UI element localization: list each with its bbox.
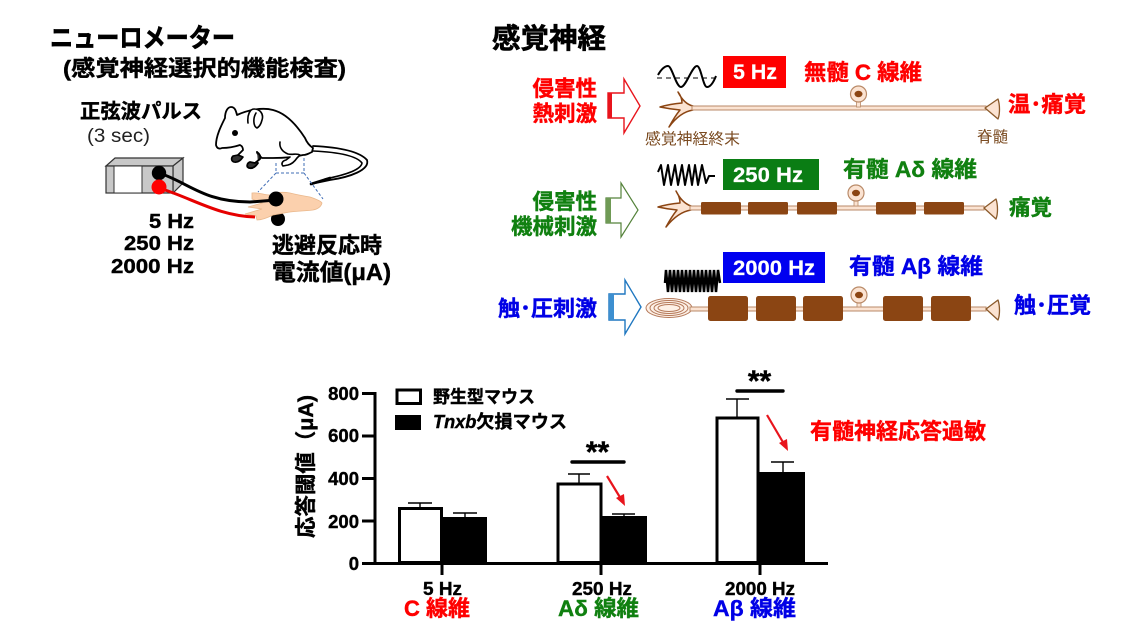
significance: 250 Hz bbox=[572, 436, 624, 469]
significance: 250 Hz: ** bbox=[586, 436, 609, 469]
badge: 5 Hz: 5 Hz bbox=[733, 61, 777, 84]
icon: 5 Hz wave bbox=[657, 66, 716, 87]
icon: 2000 Hz wave bbox=[665, 270, 720, 292]
electrode: upper black bbox=[268, 192, 284, 206]
x labels: frequencies: 5 Hz bbox=[423, 578, 462, 599]
bars: 5 Hz bbox=[400, 508, 487, 563]
badge: 5 Hz bbox=[723, 56, 786, 88]
arrow: 250 Hz decrease bbox=[607, 476, 625, 506]
label: touch and pressure sense: 触･圧覚 bbox=[1014, 293, 1091, 318]
label: sensory nerve ending: 感覚神経終末 bbox=[645, 130, 740, 148]
electrode: lower black bbox=[271, 212, 285, 226]
x labels: fiber types bbox=[404, 596, 796, 621]
terminal: red bbox=[152, 180, 166, 194]
wire: black bbox=[162, 174, 276, 202]
icon: 250 Hz wave bbox=[658, 165, 715, 185]
y axis tick labels: 200 bbox=[328, 511, 359, 532]
label: C fiber: 無髄 C 線維 bbox=[804, 60, 922, 85]
frequencies list bbox=[111, 211, 194, 278]
label: noxious mechanical stimulus bbox=[511, 190, 597, 239]
arrow: 2000 Hz decrease bbox=[767, 415, 788, 451]
x labels: frequencies bbox=[423, 578, 795, 599]
x labels: fiber types: C 線維 bbox=[404, 596, 470, 621]
terminal: black bbox=[152, 166, 166, 180]
significance: 2000 Hz bbox=[737, 365, 783, 398]
label: warmth and pain: 温･痛覚 bbox=[1008, 92, 1086, 117]
label: escape response current: 電流値(μA) bbox=[272, 259, 391, 285]
label: noxious heat stimulus bbox=[532, 77, 597, 126]
y axis tick labels bbox=[328, 383, 359, 574]
label: noxious mechanical stimulus: 侵害性 bbox=[532, 190, 597, 214]
label: spinal cord: 脊髄 bbox=[977, 128, 1008, 146]
icon: mouse paw bbox=[245, 192, 322, 220]
bars: 2000 Hz bbox=[717, 418, 805, 563]
label: touch and pressure stimulus: 触･圧刺激 bbox=[498, 297, 597, 321]
nerve: A-delta fiber bbox=[658, 185, 998, 227]
label: noxious mechanical stimulus: 機械刺激 bbox=[511, 215, 597, 239]
label: escape response current bbox=[272, 233, 391, 285]
x labels: frequencies: 250 Hz bbox=[572, 578, 632, 599]
x labels: frequencies: 2000 Hz bbox=[725, 578, 795, 599]
legend bbox=[395, 387, 567, 432]
label: A-delta fiber: 有髄 Aδ 線維 bbox=[843, 157, 977, 182]
x labels: fiber types: Aβ 線維 bbox=[713, 596, 796, 621]
frequencies list: 2000 Hz bbox=[111, 256, 194, 278]
heading: sensory nerves: 感覚神経 bbox=[492, 23, 606, 54]
subtitle: sensory nerve selective test: (感覚神経選択的機能検査) bbox=[63, 56, 346, 81]
label: A-beta fiber: 有髄 Aβ 線維 bbox=[849, 254, 983, 279]
y axis label: 応答閾値（μA) bbox=[294, 395, 318, 538]
label: noxious heat stimulus: 熱刺激 bbox=[532, 102, 597, 126]
frequencies list: 250 Hz bbox=[124, 233, 194, 255]
label: escape response current: 逃避反応時 bbox=[272, 233, 382, 258]
callout: myelinated hypersensitivity: 有髄神経応答過敏 bbox=[810, 419, 986, 444]
label: pain sensation: 痛覚 bbox=[1009, 196, 1052, 220]
x labels: fiber types: Aδ 線維 bbox=[558, 596, 639, 621]
icon: mouse bbox=[216, 107, 367, 184]
significance: 2000 Hz: ** bbox=[748, 365, 771, 398]
bars: 250 Hz bbox=[558, 484, 647, 563]
y axis tick labels: 600 bbox=[328, 425, 359, 446]
arrow: blue bbox=[609, 280, 641, 334]
axes bbox=[362, 392, 828, 575]
zoom guide: dashed blue lines bbox=[258, 158, 323, 199]
nerve: C fiber bbox=[660, 86, 1000, 127]
y axis tick labels: 0 bbox=[349, 553, 359, 574]
label: 3 sec: (3 sec) bbox=[87, 126, 150, 147]
icon: stimulator box bbox=[106, 158, 183, 193]
badge: 2000 Hz bbox=[723, 252, 825, 283]
badge: 250 Hz bbox=[723, 159, 819, 190]
legend: 野生型マウス bbox=[433, 387, 535, 407]
badge: 250 Hz: 250 Hz bbox=[733, 164, 803, 187]
badge: 2000 Hz: 2000 Hz bbox=[733, 257, 815, 280]
label: sine wave pulse: 正弦波パルス bbox=[80, 100, 202, 123]
nerve: A-beta fiber bbox=[646, 287, 1000, 321]
arrow: red bbox=[608, 79, 640, 133]
y axis tick labels: 800 bbox=[328, 383, 359, 404]
y axis tick labels: 400 bbox=[328, 468, 359, 489]
title: neurometer: ニューロメーター bbox=[50, 23, 235, 53]
wire: red bbox=[165, 190, 255, 217]
arrow: green bbox=[606, 183, 638, 237]
legend: Tnxb欠損マウス bbox=[433, 411, 567, 432]
bar chart bbox=[294, 365, 986, 621]
frequencies list: 5 Hz bbox=[149, 211, 194, 233]
label: noxious heat stimulus: 侵害性 bbox=[532, 77, 597, 101]
error bars bbox=[408, 399, 794, 517]
